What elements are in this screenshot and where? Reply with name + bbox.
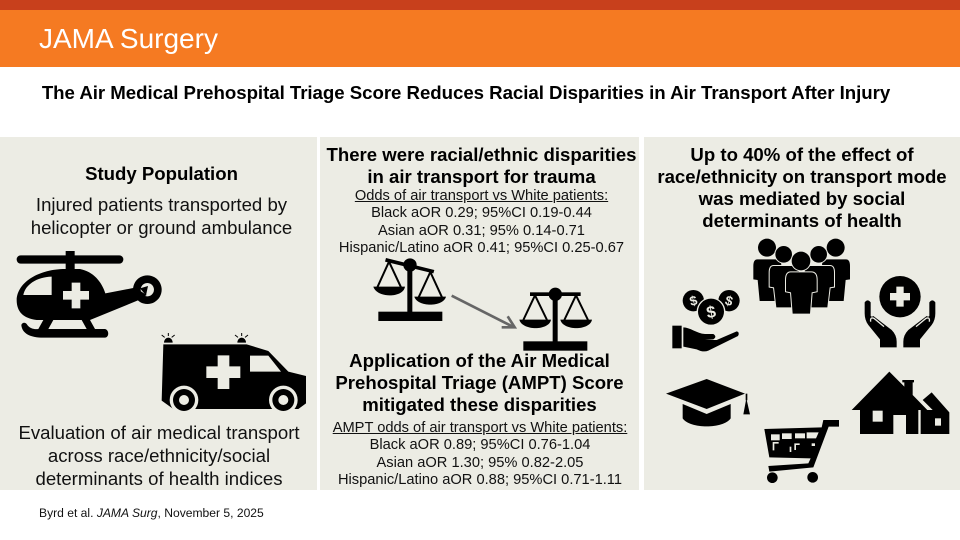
- citation: Byrd et al. JAMA Surg, November 5, 2025: [39, 506, 264, 520]
- icon: people: [753, 239, 850, 314]
- icon: scales and arrow: [373, 258, 592, 351]
- text: evaluation: [18, 422, 300, 488]
- panel: study population: [0, 137, 317, 490]
- heading: disparities: [326, 144, 637, 187]
- heading: AMPT application: mitigated these disparities: [362, 394, 597, 415]
- icon: houses: [852, 372, 949, 434]
- text: odds before AMPT: Odds of air transport vs White patients:: [355, 188, 608, 204]
- text: AMPT odds: Hispanic/Latino aOR 0.88; 95%CI 0.71-1.11: [338, 472, 622, 488]
- heading: disparities: There were racial/ethnic disparities: [326, 144, 637, 165]
- heading: up to 40%: [657, 144, 947, 231]
- icon: graduation cap: [666, 379, 750, 426]
- heading: AMPT application: Prehospital Triage (AMPT) Score: [335, 372, 624, 393]
- heading: up to 40%: determinants of health: [702, 210, 902, 231]
- heading: up to 40%: was mediated by social: [699, 188, 905, 209]
- text: evaluation: Evaluation of air medical transport: [18, 422, 300, 442]
- text: injured patients: [31, 194, 292, 238]
- text: evaluation: across race/ethnicity/social: [48, 444, 270, 466]
- header band: [0, 0, 960, 67]
- heading: disparities: in air transport for trauma: [367, 166, 596, 187]
- text: AMPT odds: Black aOR 0.89; 95%CI 0.76-1.04: [370, 437, 590, 453]
- text: odds before AMPT: Black aOR 0.29; 95%CI 0.19-0.44: [371, 205, 592, 221]
- text: injured patients: Injured patients transported by: [36, 194, 287, 214]
- heading: up to 40%: race/ethnicity on transport mode: [657, 166, 947, 187]
- icon: medical hands: [865, 276, 935, 347]
- heading: AMPT application: Application of the Air Medical: [349, 350, 610, 371]
- icon: hand with coins: $: [688, 292, 699, 309]
- icon: hand with coins: [672, 290, 740, 351]
- title: The Air Medical Prehospital Triage Score Reduces Racial Disparities in Air Transport After Injury: [42, 82, 890, 103]
- heading: AMPT application: [335, 350, 624, 415]
- text: AMPT odds: Asian aOR 1.30; 95% 0.82-2.05: [377, 455, 583, 471]
- heading: up to 40%: Up to 40% of the effect of: [690, 144, 914, 165]
- text: odds before AMPT: Hispanic/Latino aOR 0.41; 95%CI 0.25-0.67: [339, 240, 624, 256]
- icon: shopping cart: [764, 420, 839, 483]
- panel: disparities: [320, 137, 639, 490]
- icon: hand with coins: $: [705, 302, 718, 322]
- heading: study population: Study Population: [85, 163, 238, 184]
- journal name: JAMA Surgery: [39, 23, 218, 54]
- text: odds before AMPT: [339, 188, 624, 256]
- panel: social determinants: [644, 137, 960, 490]
- icon: ambulance: [161, 333, 306, 411]
- icon: helicopter: [16, 251, 162, 338]
- icon: hand with coins: $: [723, 293, 735, 309]
- text: AMPT odds: [332, 420, 628, 488]
- text: AMPT odds: AMPT odds of air transport vs White patients:: [333, 420, 627, 436]
- text: injured patients: helicopter or ground ambulance: [31, 216, 292, 238]
- text: odds before AMPT: Asian aOR 0.31; 95% 0.14-0.71: [378, 223, 585, 239]
- text: evaluation: determinants of health indices: [35, 468, 283, 488]
- icons: social determinants: [666, 238, 950, 483]
